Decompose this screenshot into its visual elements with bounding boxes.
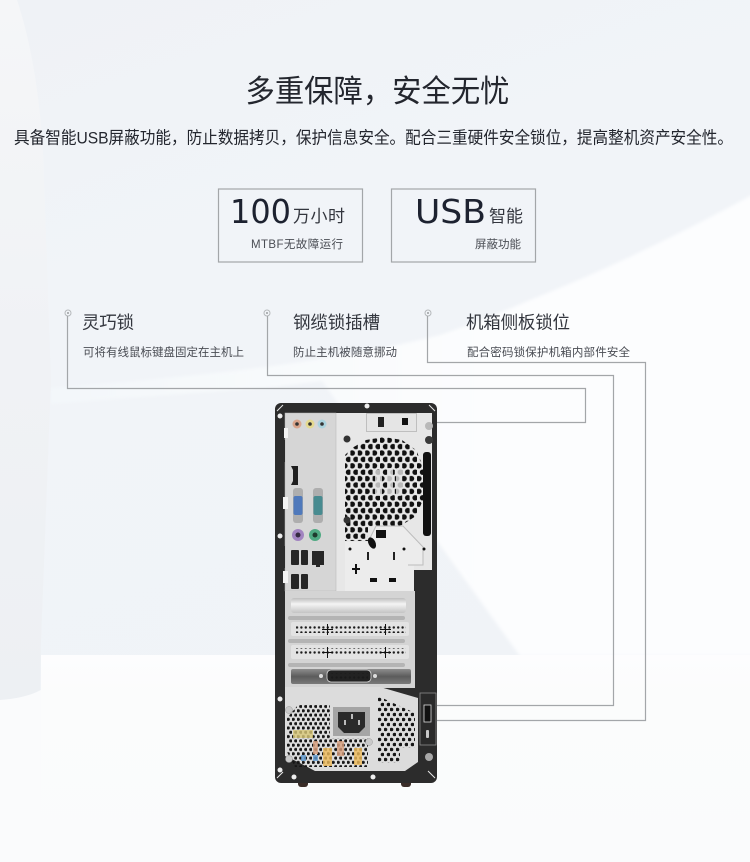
caption: MTBF无故障运行: MTBF无故障运行 — [251, 237, 343, 251]
power inlet — [333, 707, 370, 736]
side panel lock handle — [423, 452, 431, 536]
side lock box — [420, 693, 436, 745]
computer tower rear view — [275, 403, 437, 787]
I/O shield — [285, 413, 336, 591]
stat: USB智能 — [415, 192, 523, 231]
cable-lock plate — [366, 414, 416, 432]
expansion slots panel — [285, 591, 415, 688]
HDMI port — [291, 466, 298, 485]
upper silver plate — [285, 413, 432, 591]
power supply plate — [285, 687, 418, 771]
serial port — [313, 488, 323, 523]
feet — [298, 780, 411, 787]
connector line: 机箱侧板锁位 — [425, 310, 646, 720]
stat: 100万小时 — [230, 192, 345, 231]
PS/2 ports — [292, 529, 321, 541]
panel: USB — [392, 189, 536, 262]
screws — [278, 404, 433, 538]
psu screws — [286, 706, 372, 762]
connector line: 钢缆锁插槽 — [264, 310, 614, 706]
USB and LAN ports — [291, 550, 324, 589]
feature: 机箱侧板锁位: 机箱侧板锁位 — [466, 312, 570, 332]
bracket plate — [345, 526, 426, 591]
caption: 屏蔽功能: 屏蔽功能 — [475, 237, 522, 251]
chassis — [275, 403, 437, 783]
feature: 灵巧锁: 可将有线鼠标键盘固定在主机上 — [83, 345, 244, 359]
connector line: 灵巧锁 — [65, 310, 586, 422]
hex vents — [345, 437, 423, 541]
panel: MTBF — [218, 189, 362, 262]
feature: 钢缆锁插槽: 防止主机被随意挪动 — [293, 345, 397, 359]
feature: 灵巧锁 — [82, 312, 244, 359]
audio jacks — [292, 420, 326, 428]
psu vent right — [378, 696, 415, 763]
stat: USB智能: 智能 — [489, 207, 523, 226]
psu vent left — [287, 705, 368, 767]
internal cables — [293, 730, 362, 766]
stat: 100万小时: 100 — [230, 192, 291, 231]
feature: 机箱侧板锁位: 配合密码锁保护机箱内部件安全 — [467, 345, 630, 359]
feature: 机箱侧板锁位 — [466, 312, 630, 359]
title: 多重保障，安全无忧 — [246, 74, 510, 109]
feature: 钢缆锁插槽 — [293, 312, 397, 359]
stat: 100万小时: 万小时 — [293, 207, 345, 226]
feature: 灵巧锁: 灵巧锁 — [82, 312, 134, 332]
bottom black bar screws — [278, 696, 376, 780]
side clip notches — [283, 428, 288, 583]
stat: USB智能: USB — [415, 192, 486, 231]
VGA port — [293, 488, 303, 523]
feature: 钢缆锁插槽: 钢缆锁插槽 — [293, 312, 380, 332]
corner highlights — [277, 405, 435, 778]
